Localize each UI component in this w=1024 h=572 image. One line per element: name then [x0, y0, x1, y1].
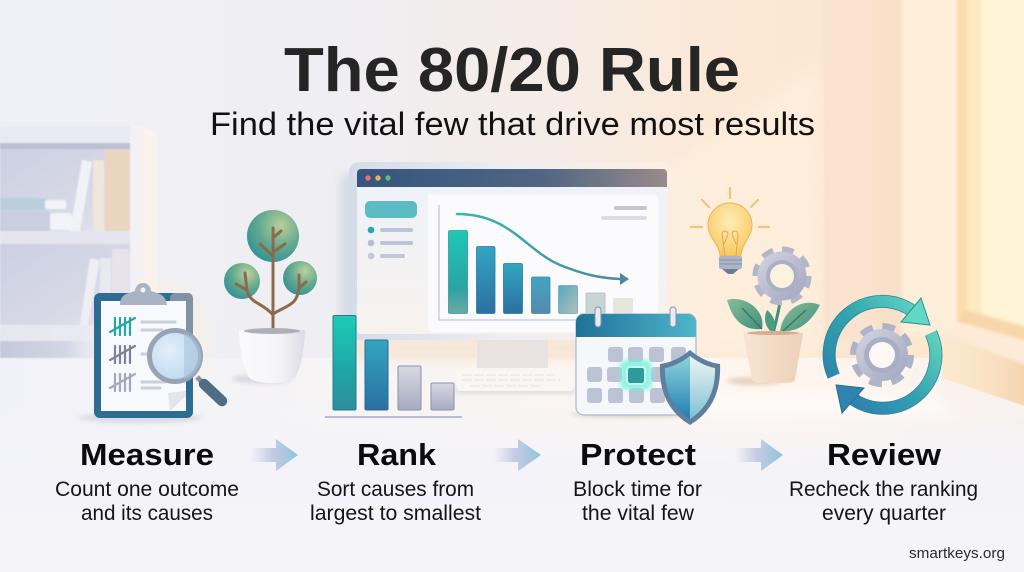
magnifier	[150, 330, 222, 401]
gear	[854, 327, 910, 383]
icon: clipboard with magnifier	[78, 270, 222, 423]
title: The 80/20 Rule	[284, 36, 740, 105]
step: Measure	[55, 437, 239, 525]
chart panel	[428, 194, 658, 332]
arrow: Measure to Rank	[250, 439, 298, 471]
arrow: Protect to Review	[735, 439, 783, 471]
icon: calendar with shield	[570, 307, 720, 425]
step: Measure: and its causes	[81, 501, 213, 525]
bookshelf	[0, 126, 158, 358]
bar chart: ranked causes	[325, 316, 462, 417]
gear	[756, 250, 808, 302]
icon: gear plant in pot	[727, 250, 820, 385]
date cells	[587, 347, 686, 403]
step: Protect: Protect	[580, 437, 696, 472]
keyboard	[455, 370, 575, 394]
sidebar	[365, 201, 417, 259]
step: Review: Recheck the ranking	[789, 477, 978, 501]
site credit: smartkeys.org	[909, 545, 1005, 562]
step: Measure: Count one outcome	[55, 477, 239, 501]
shield	[660, 350, 720, 425]
icon: light bulb	[691, 188, 769, 274]
tally rows	[110, 318, 175, 391]
step: Rank: Sort causes from	[317, 477, 474, 501]
step: Protect: Block time for	[573, 477, 702, 501]
step: Review: every quarter	[822, 501, 946, 525]
step: Review: Review	[827, 437, 942, 472]
step: Measure: Measure	[80, 437, 214, 472]
desk surface	[0, 358, 1024, 572]
monitor with Pareto chart	[340, 162, 680, 394]
subtitle: Find the vital few that drive most results	[210, 106, 815, 142]
icon: tree plant in white pot	[224, 210, 317, 384]
window	[824, 0, 1024, 410]
step: Review	[789, 437, 978, 525]
step: Rank: largest to smallest	[310, 501, 481, 525]
step: Protect	[573, 437, 702, 525]
step: Rank	[310, 437, 481, 525]
step: Protect: the vital few	[582, 501, 694, 525]
icon: review cycle with gear	[829, 298, 936, 413]
step: Rank: Rank	[357, 437, 437, 472]
highlighted date	[620, 360, 652, 390]
arrow: Rank to Protect	[493, 439, 541, 471]
